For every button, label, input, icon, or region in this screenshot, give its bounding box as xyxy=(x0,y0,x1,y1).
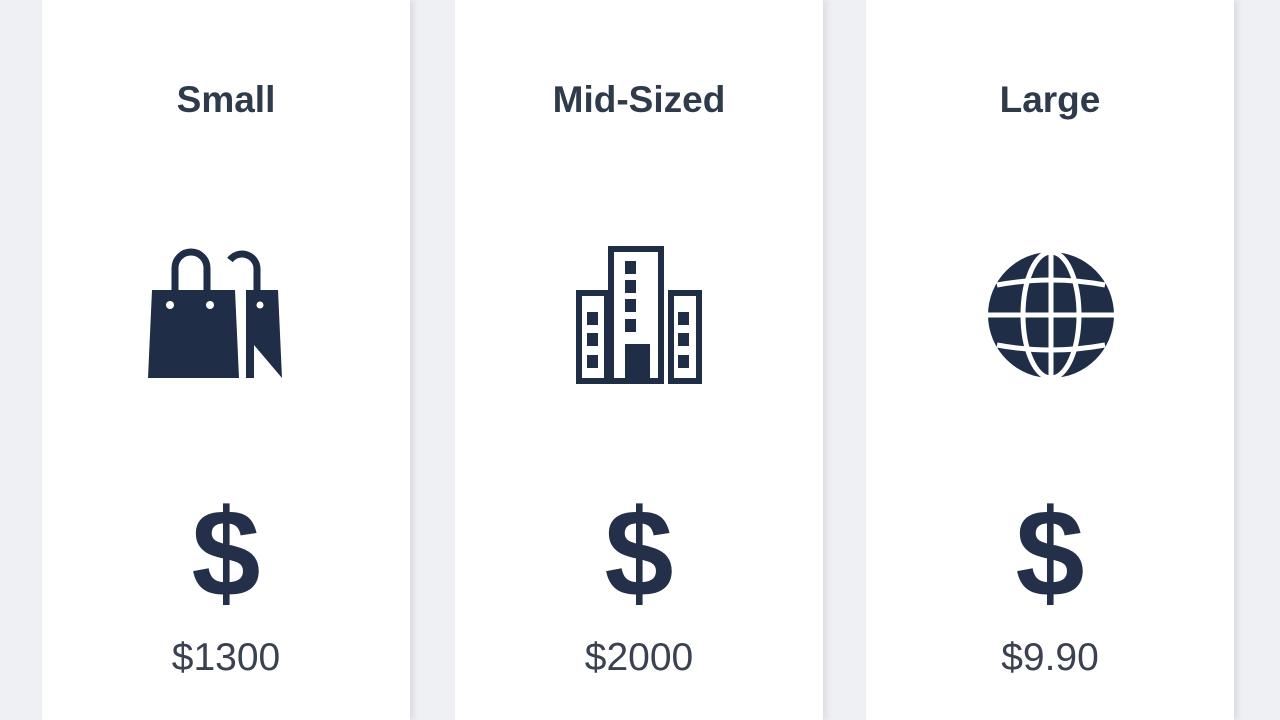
icon: globe xyxy=(988,252,1114,378)
price: large: $9.90 xyxy=(1001,636,1099,679)
icon: dollar: $ xyxy=(192,485,260,623)
panel: large xyxy=(866,0,1234,720)
heading: small: Small xyxy=(177,79,275,120)
icon: dollar: $ xyxy=(1016,485,1084,623)
heading: mid-sized: Mid-Sized xyxy=(553,79,725,120)
icon: dollar: $ xyxy=(605,485,673,623)
icon: shopping bags xyxy=(148,248,282,378)
panel: small xyxy=(42,0,410,720)
heading: large: Large xyxy=(1000,79,1100,120)
price: small: $1300 xyxy=(172,636,280,679)
price: mid-sized: $2000 xyxy=(585,636,693,679)
panel: mid-sized xyxy=(455,0,823,720)
icon: building xyxy=(576,246,702,384)
